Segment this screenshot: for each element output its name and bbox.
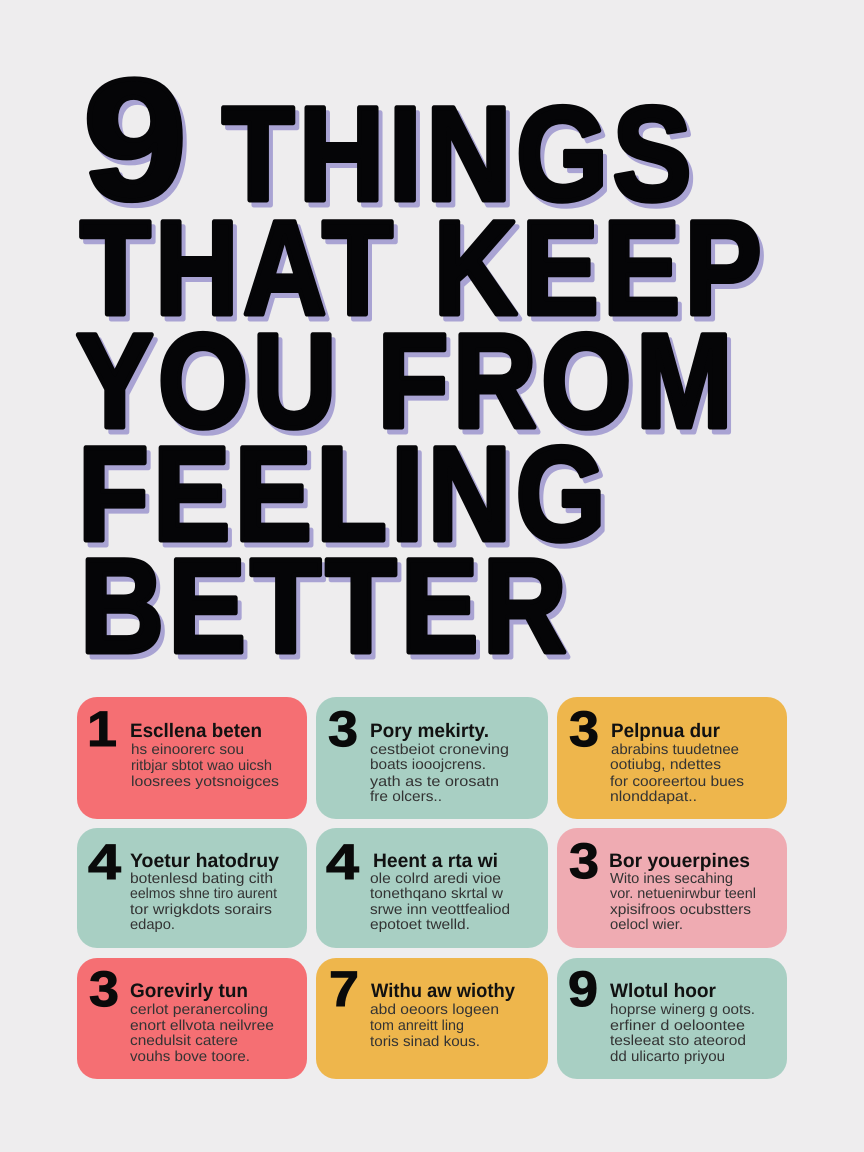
panel: card 3: ootiubg, ndettes [610, 757, 721, 773]
panel: card 2: Pory mekirty. [370, 720, 489, 742]
panel: card 5: ole colrd aredi vioe [370, 871, 501, 887]
panel: card 9: dd ulicarto priyou [610, 1049, 725, 1065]
panel: card 1: hs einoorerc sou [131, 742, 244, 758]
panel: card 3 [557, 697, 787, 819]
panel: card 8: Withu aw wiothy [371, 980, 515, 1002]
title: FEELING [78, 420, 610, 569]
panel: card 9: 9 [568, 961, 598, 1017]
panel: card 4: botenlesd bating cith [130, 871, 273, 887]
panel: card 7: vouhs bove toore. [130, 1049, 250, 1065]
panel: card 8: abd oeoors logeen [370, 1002, 499, 1018]
panel: card 4: eelmos shne tiro aurent [130, 886, 277, 902]
title: YOU FROM [76, 307, 737, 456]
panel: card 5 [316, 828, 548, 948]
title: BETTER [80, 532, 571, 681]
panel: card 6: xpisifroos ocubstters [610, 902, 751, 918]
panel: card 4: edapo. [130, 917, 175, 933]
title: THINGS [222, 80, 696, 229]
panel: card 2 [316, 697, 548, 819]
panel: card 8: tom anreitt ling [370, 1018, 464, 1034]
panel: card 3: nlonddapat.. [610, 789, 697, 805]
panel: card 5: Heent a rta wi [373, 850, 498, 872]
panel: card 5: tonethqano skrtal w [370, 886, 504, 902]
panel: card 6 [557, 828, 787, 948]
panel: card 3: 3 [569, 701, 599, 757]
title [76, 44, 766, 681]
panel: card 7: Gorevirly tun [130, 980, 248, 1002]
panel: card 1: 1 [87, 701, 117, 757]
panel: card 8 [316, 958, 548, 1079]
panel: card 5: srwe inn veottfealiod [370, 902, 510, 918]
panel: card 2: cestbeiot croneving [370, 742, 509, 758]
panel: card 7: 3 [89, 961, 119, 1017]
panel: card 6: Wito ines secahing [610, 871, 733, 887]
panel: card 6: oelocl wier. [610, 917, 683, 933]
panel: card 3: abrabins tuudetnee [611, 742, 739, 758]
panel: card 4: tor wrigkdots sorairs [130, 902, 272, 918]
panel: card 9 [557, 958, 787, 1079]
panel: card 4: Yoetur hatodruy [130, 850, 279, 872]
panel: card 7: cnedulsit catere [130, 1033, 238, 1049]
panel: card 9: erfiner d oeloontee [610, 1018, 745, 1034]
panel: card 3: for cooreertou bues [610, 774, 744, 790]
panel: card 7: cerlot peranercoling [130, 1002, 268, 1018]
panel: card 3: Pelpnua dur [611, 720, 720, 742]
panel: card 9: Wlotul hoor [610, 980, 716, 1002]
panel: card 2: 3 [328, 701, 358, 757]
title: 9 [83, 44, 187, 236]
panel: card 8: 7 [329, 961, 359, 1017]
panel: card 9: hoprse winerg g oots. [610, 1002, 755, 1018]
panel: card 5: epotoet twelld. [370, 917, 470, 933]
panel: card 7 [77, 958, 307, 1079]
panel: card 1: ritbjar sbtot wao uicsh [131, 758, 272, 774]
panel: card 4: 4 [88, 834, 121, 890]
panel: card 2: boats iooojcrens. [370, 757, 486, 773]
panel: card 9: tesleeat sto ateorod [610, 1033, 746, 1049]
panel: card 5: 4 [326, 834, 359, 890]
panel: card 6: vor. netuenirwbur teenl [610, 886, 756, 902]
panel: card 7: enort ellvota neilvree [130, 1018, 274, 1034]
panel: card 1: loosrees yotsnoigces [131, 774, 279, 790]
title: THAT KEEP [80, 194, 766, 343]
panel: card 2: fre olcers.. [370, 789, 442, 805]
panel: card 6: 3 [569, 833, 599, 889]
panel: card 6: Bor youerpines [609, 850, 750, 872]
panel: card 1 [77, 697, 307, 819]
panel: card 8: toris sinad kous. [370, 1034, 480, 1050]
panel: card 4 [77, 828, 307, 948]
panel: card 2: yath as te orosatn [370, 774, 499, 790]
panel: card 1: Escllena beten [130, 720, 262, 742]
